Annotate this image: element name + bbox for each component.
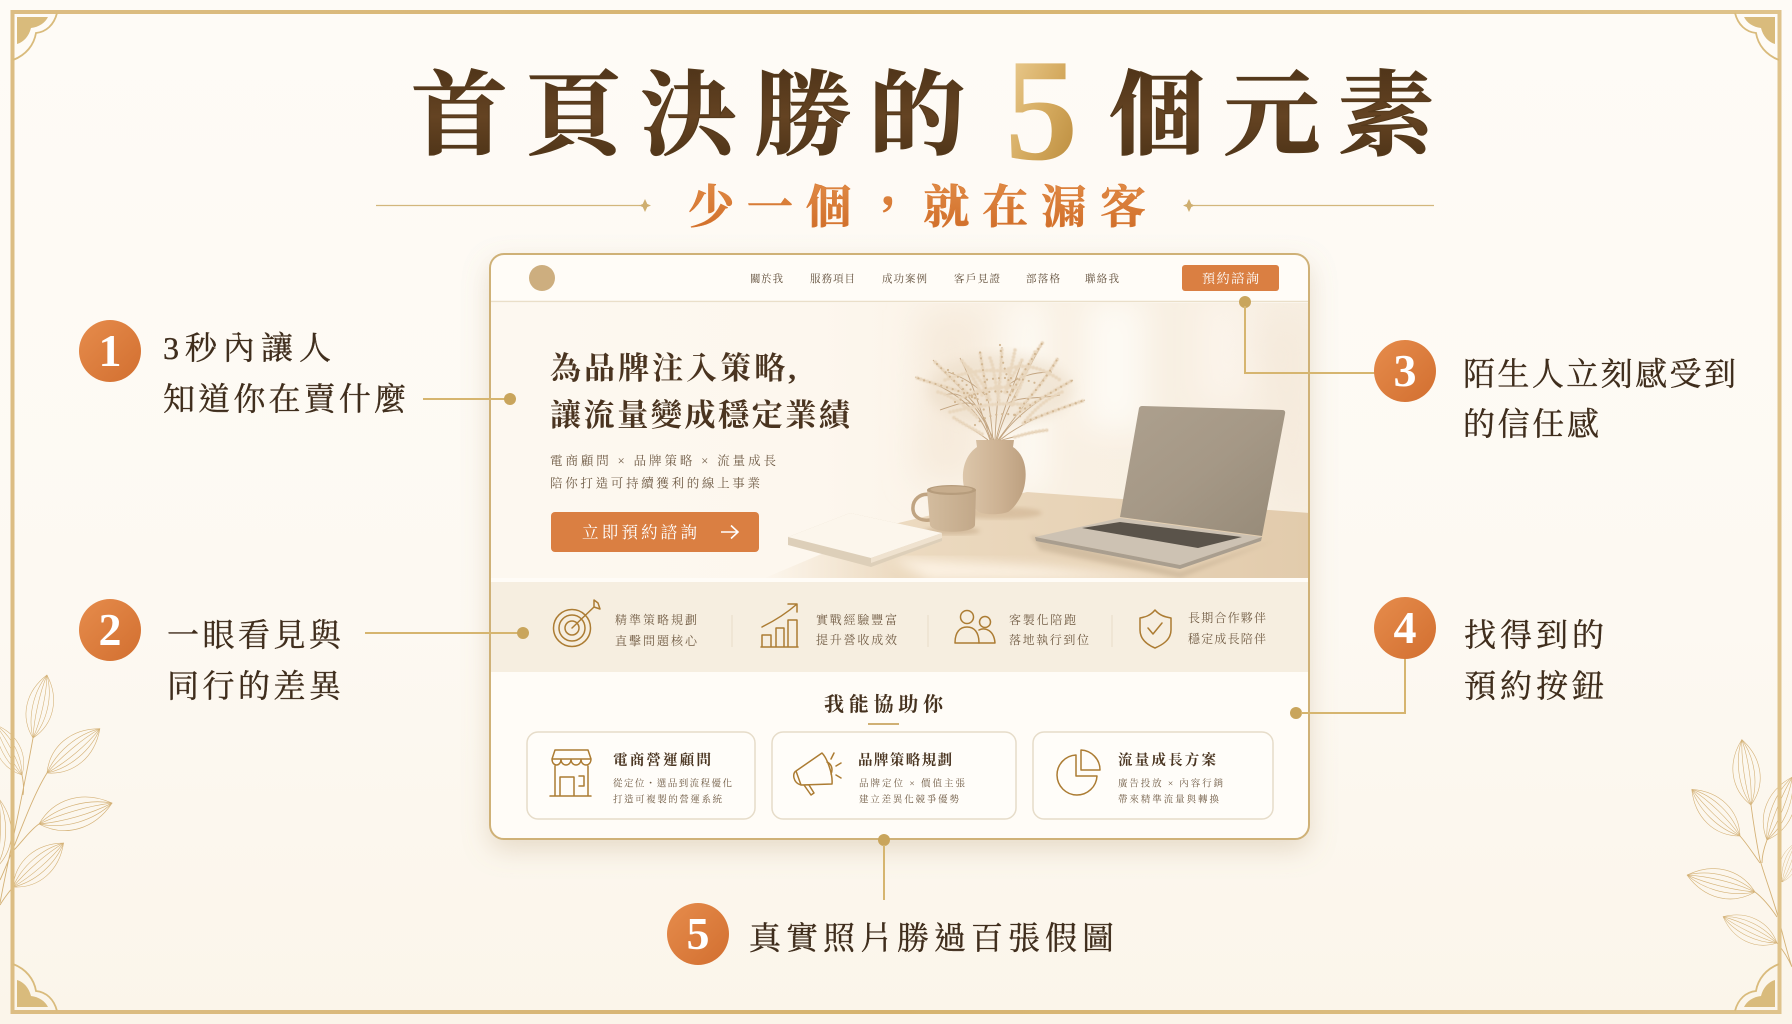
- nav links: 服務項目: [810, 273, 855, 285]
- callout 1: [79, 320, 516, 417]
- icon: shield check: [1140, 610, 1171, 648]
- hero call-to-action button: [551, 512, 759, 552]
- hero description: [550, 453, 776, 490]
- icon: target: [554, 600, 600, 646]
- service card: e-commerce: 電商營運顧問: [613, 751, 711, 769]
- service card: e-commerce: 打造可複製的營運系統: [613, 794, 722, 806]
- service card: e-commerce: [527, 732, 755, 819]
- service card: brand strategy: 品牌策略規劃: [858, 751, 952, 769]
- subtitle with divider lines: [376, 182, 1434, 233]
- feature: customized support: 客製化陪跑: [1009, 612, 1076, 627]
- callout 3: 的信任感: [1463, 406, 1599, 442]
- service card: traffic growth: 廣告投放 × 內容行銷: [1118, 778, 1223, 790]
- feature: precise strategy: 直擊問題核心: [615, 633, 698, 648]
- hero heading: 讓流量變成穩定業績: [550, 398, 854, 433]
- nav links: [750, 272, 1120, 285]
- title: 首頁決勝的: [411, 66, 965, 167]
- photo: notebook: [788, 513, 942, 567]
- feature: customized support: 落地執行到位: [1009, 632, 1089, 647]
- nav links: 聯絡我: [1085, 272, 1120, 285]
- title: [411, 29, 1435, 191]
- icon: pie chart: [1057, 750, 1100, 795]
- photo: laptop: [1030, 406, 1285, 578]
- arrow: callout 1 connector: [423, 393, 516, 405]
- arrow: callout 4 connector: [1290, 658, 1405, 719]
- panel: website mockup: [490, 254, 1310, 839]
- callout 4: [1290, 597, 1604, 719]
- callout 1: 1: [98, 325, 122, 376]
- arrow: callout 2 connector: [365, 627, 529, 639]
- service card: e-commerce: 從定位・選品到流程優化: [613, 778, 732, 790]
- nav links: 客戶見證: [954, 272, 1000, 285]
- photo: table: [760, 492, 1310, 580]
- feature: long-term partner: 長期合作夥伴: [1188, 610, 1266, 625]
- icon: storefront: [550, 750, 591, 796]
- callout 1: 3秒內讓人: [163, 330, 331, 366]
- feature: precise strategy: [554, 600, 698, 648]
- feature: practical experience: [761, 604, 897, 647]
- nav button: [1182, 265, 1279, 291]
- feature: long-term partner: [1140, 610, 1266, 648]
- subtitle with divider lines: 少一個，就在漏客: [688, 182, 1146, 233]
- hero description: 電商顧問 × 品牌策略 × 流量成長: [550, 453, 776, 468]
- hero heading: [550, 351, 854, 433]
- service card: traffic growth: [1033, 732, 1273, 819]
- callout 3: [1239, 296, 1736, 442]
- service card: brand strategy: [772, 732, 1016, 819]
- callout 5: 真實照片勝過百張假圖: [749, 920, 1114, 956]
- icon: people: [955, 610, 995, 643]
- botanical decoration: left leaves: [0, 672, 116, 905]
- title: 個元素: [1109, 66, 1435, 167]
- feature: long-term partner: 穩定成長陪伴: [1188, 631, 1266, 646]
- callout 4: 4: [1394, 602, 1416, 653]
- callout 2: 2: [98, 604, 122, 655]
- callout 4: 找得到的: [1464, 617, 1604, 653]
- photo: coffee mug: [913, 485, 980, 535]
- logo circle: [529, 265, 555, 291]
- icon: growth chart: [761, 604, 798, 647]
- icon: megaphone: [794, 753, 841, 795]
- mockup card frame: [490, 254, 1309, 839]
- callout 2: [79, 599, 529, 704]
- hero heading: 為品牌注入策略,: [550, 351, 796, 386]
- callout 1: 知道你在賣什麼: [163, 381, 406, 417]
- photo: wall light: [921, 303, 1146, 480]
- callout 3: 3: [1394, 345, 1416, 396]
- nav links: 關於我: [750, 272, 784, 285]
- service card: brand strategy: 建立差異化競爭優勢: [859, 794, 959, 806]
- feature: precise strategy: 精準策略規劃: [615, 612, 697, 627]
- services heading: 我能協助你: [824, 693, 945, 716]
- callout 2: 同行的差異: [167, 668, 342, 704]
- callout 4: 預約按鈕: [1464, 668, 1604, 704]
- title: 5: [1005, 29, 1078, 191]
- nav links: 成功案例: [882, 272, 927, 285]
- services heading: [824, 693, 945, 725]
- nav links: 部落格: [1026, 272, 1060, 285]
- feature: customized support: [955, 610, 1089, 647]
- photo: vase with dried flowers: [915, 342, 1085, 519]
- callout 5: 5: [686, 908, 710, 959]
- hero text block: [550, 351, 854, 552]
- callout 5: [667, 834, 1114, 965]
- hero description: 陪你打造可持續獲利的線上事業: [550, 476, 760, 490]
- callout 3: 陌生人立刻感受到: [1463, 356, 1736, 392]
- hero section with photo: [659, 303, 1308, 578]
- nav button: 預約諮詢: [1202, 271, 1259, 286]
- feature: practical experience: 提升營收成效: [816, 632, 897, 647]
- botanical decoration: right leaves: [1682, 738, 1792, 967]
- feature: practical experience: 實戰經驗豐富: [816, 612, 897, 627]
- callout 2: 一眼看見與: [167, 617, 343, 653]
- service card: brand strategy: 品牌定位 × 價值主張: [859, 778, 965, 790]
- service card: traffic growth: 流量成長方案: [1118, 751, 1216, 769]
- hero call-to-action button: 立即預約諮詢: [582, 523, 697, 542]
- arrow: callout 5 connector: [878, 834, 890, 900]
- feature strip: [491, 582, 1308, 672]
- service card: traffic growth: 帶來精準流量與轉換: [1118, 794, 1219, 806]
- arrow: callout 3 connector: [1239, 296, 1376, 373]
- mockup navigation bar: [491, 265, 1308, 302]
